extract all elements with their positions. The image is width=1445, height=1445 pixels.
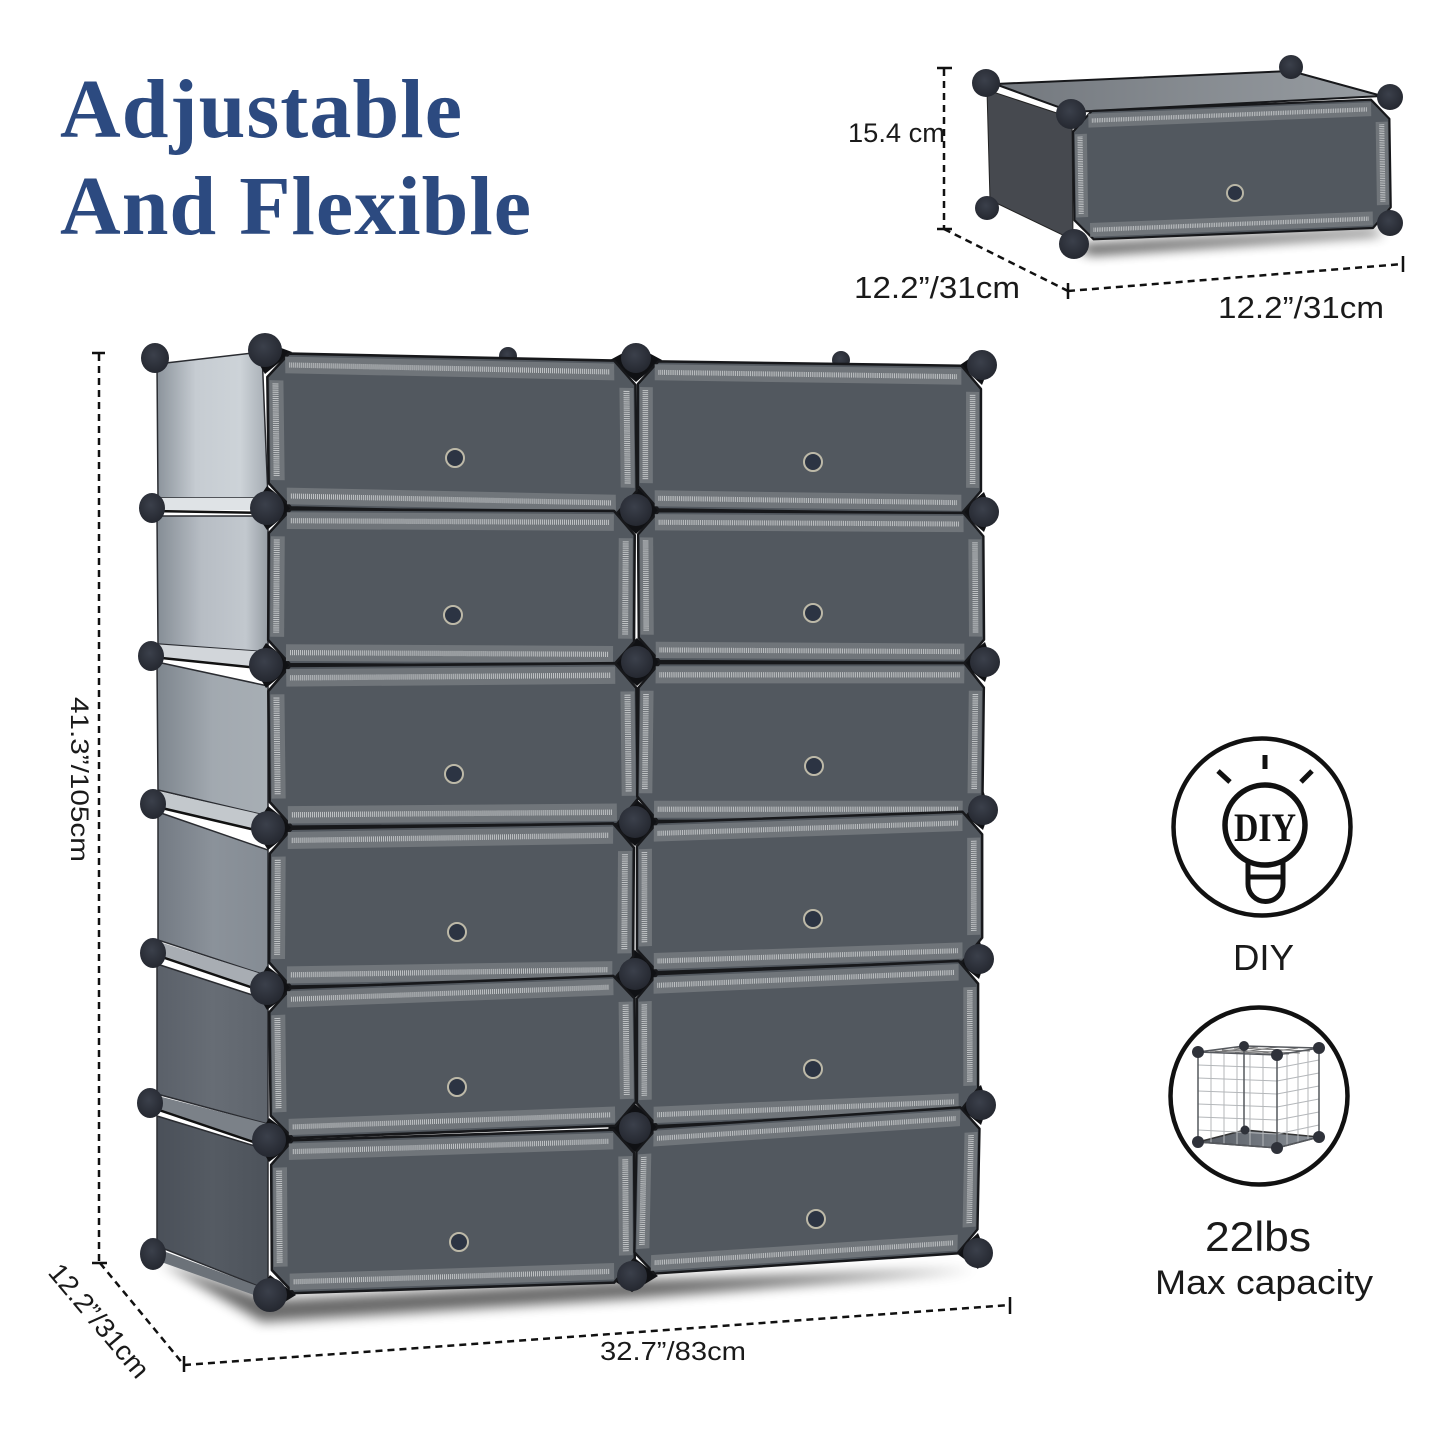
- cube width label: 12.2”/31cm: [1218, 290, 1384, 325]
- round connectors: [137, 333, 1000, 1312]
- cube height label: 15.4 cm: [848, 118, 945, 148]
- drawer row 2 left: [268, 509, 635, 666]
- cube door: [1073, 99, 1391, 240]
- side panels: [157, 352, 268, 1290]
- side rails: [150, 498, 268, 1300]
- cube side panel: [987, 90, 1073, 240]
- drawer row 3 left: [268, 663, 638, 827]
- wire shelf floor: [1198, 1130, 1319, 1148]
- black corner joints: [252, 342, 992, 1311]
- title: [60, 63, 531, 253]
- dimension lines: large cabinet: [92, 353, 1010, 1372]
- drawer row 6 left: [271, 1129, 635, 1294]
- cube connectors: [972, 55, 1403, 259]
- cube depth label: 12.2”/31cm: [854, 270, 1020, 305]
- drawer row 5 right: [637, 960, 978, 1127]
- drawer row 1 right: [638, 361, 981, 514]
- depth label: 12.2”/31cm: [42, 1258, 155, 1384]
- wire mesh: [1198, 1050, 1319, 1147]
- drawer row 1 left: [267, 353, 637, 515]
- title: Adjustable: [60, 63, 462, 156]
- wire frame: [1198, 1046, 1319, 1148]
- top back connectors: [499, 347, 850, 369]
- large cabinet: [137, 333, 1000, 1322]
- capacity label: Max capacity: [1155, 1264, 1373, 1302]
- icon: DIY bulb: DIY: [1234, 805, 1296, 850]
- drawer row 2 right: [638, 511, 984, 663]
- DIY label: DIY: [1233, 937, 1294, 978]
- right column drawers: [634, 361, 984, 1275]
- dimension lines: small cube: [937, 68, 1403, 299]
- floor shadow: [160, 1262, 975, 1322]
- height label: 41.3”/105cm: [65, 697, 93, 862]
- title: And Flexible: [60, 160, 531, 253]
- width label: 32.7”/83cm: [600, 1336, 746, 1366]
- drawer row 4 right: [637, 811, 982, 973]
- drawer row 6 right: [634, 1106, 980, 1275]
- drawer row 5 left: [269, 975, 636, 1139]
- wire cube connectors: [1192, 1041, 1325, 1154]
- icon: DIY bulb: [1174, 738, 1350, 916]
- cube top panel: [995, 71, 1382, 112]
- drawer row 4 left: [269, 823, 634, 987]
- wire top mesh: [1210, 1047, 1310, 1054]
- left column drawers: [267, 353, 638, 1294]
- small single cube cabinet: [972, 55, 1403, 259]
- drawer row 3 right: [637, 663, 984, 821]
- capacity value: 22lbs: [1205, 1213, 1311, 1260]
- icon: wire cube capacity: [1170, 1008, 1348, 1184]
